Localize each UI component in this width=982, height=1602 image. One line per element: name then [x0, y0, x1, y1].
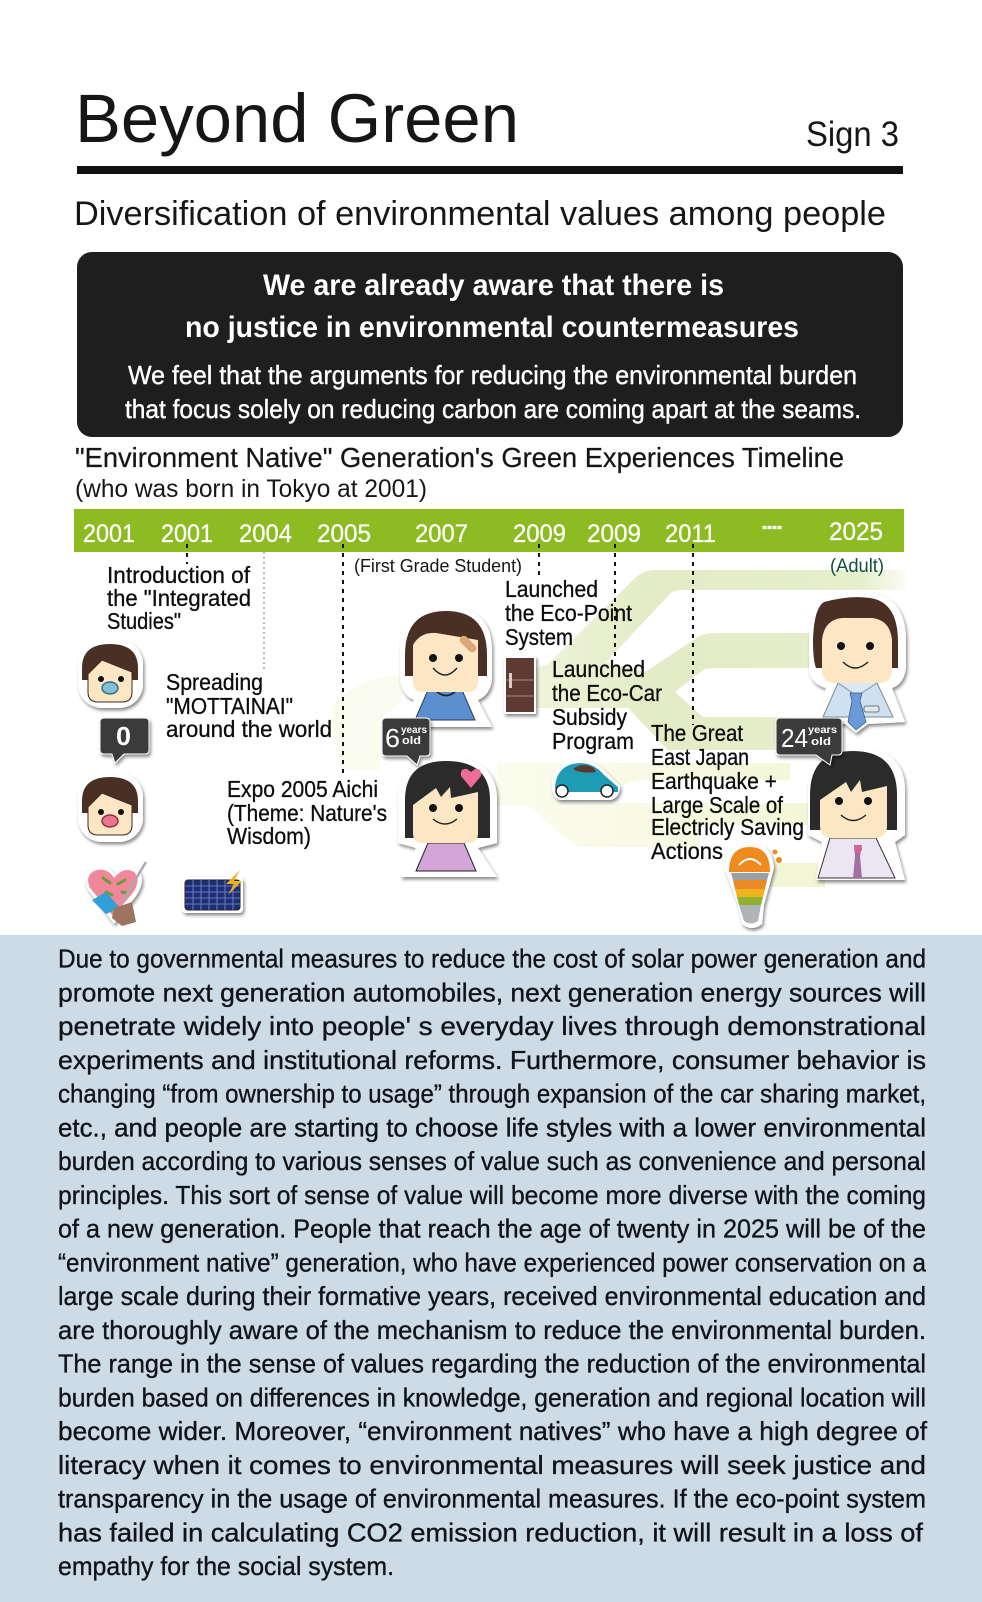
panel: explanatory text: empathy for the social system. — [58, 1551, 394, 1581]
event: mottainai — [166, 669, 332, 742]
event: expo 2005: Wisdom) — [227, 823, 311, 849]
event: integrated studies: the "Integrated — [107, 585, 251, 611]
bubble: age 24: old — [811, 736, 831, 748]
icon: sad light bulb — [725, 843, 782, 928]
event: earthquake: The Great — [651, 720, 743, 746]
subtitle: Diversification of environmental values among people — [74, 195, 886, 233]
year labels: 2011 — [665, 520, 716, 548]
icon: baby with blue pacifier — [78, 640, 143, 708]
event: eco-car: Launched — [552, 656, 645, 682]
panel: explanatory text: literacy when it comes to environmental measures will seek justice and — [58, 1450, 926, 1480]
stage label: adult: (Adult) — [830, 556, 884, 577]
panel: dark message box — [77, 252, 903, 437]
panel: dark message box: We feel that the arguments for reducing the environmental burden — [128, 360, 857, 390]
event: eco-point: Launched — [505, 576, 598, 602]
event: earthquake: Large Scale of — [651, 792, 783, 818]
event: eco-car: Program — [552, 728, 634, 754]
year labels: 2025 — [829, 518, 883, 546]
event: earthquake: Earthquake + — [651, 768, 777, 794]
event: expo 2005: (Theme: Nature's — [227, 800, 387, 826]
timeline bar — [74, 509, 904, 552]
panel: explanatory text: has failed in calculating CO2 emission reduction, it will result in a loss of — [58, 1517, 924, 1547]
event: expo 2005 — [227, 776, 387, 849]
panel: explanatory text: burden based on differences in knowledge, generation and regional location will — [58, 1382, 926, 1412]
sign number: Sign 3 — [806, 115, 899, 154]
year labels: 2001 — [161, 520, 213, 548]
panel: explanatory text: penetrate widely into people' s everyday lives through demonstrational — [58, 1011, 926, 1041]
event: integrated studies — [107, 562, 251, 634]
bubble: age 6: 6 — [385, 723, 400, 753]
event: eco-car — [552, 656, 662, 754]
icon: baby with pink pacifier — [78, 773, 143, 842]
event: integrated studies: Introduction of — [107, 562, 250, 588]
icon: adult man — [809, 592, 906, 733]
event: mottainai: around the world — [166, 716, 332, 742]
panel: explanatory text: promote next generation automobiles, next generation energy sources will — [58, 977, 926, 1007]
panel: explanatory text: The range in the sense of values regarding the reduction of the environmental — [58, 1349, 926, 1379]
icon: refrigerator — [504, 656, 536, 714]
bubble: age 6 — [382, 718, 430, 765]
event: eco-point — [505, 576, 632, 650]
timeline heading: (who was born in Tokyo at 2001) — [75, 475, 427, 503]
event: earthquake — [651, 720, 804, 864]
panel: explanatory text: changing “from ownership to usage” through expansion of the car sharing market, — [58, 1079, 926, 1109]
bubble: age 0: 0 — [116, 721, 131, 751]
icon: boy age 6 — [400, 607, 492, 727]
panel: dark message box: that focus solely on reducing carbon are coming apart at the seams. — [125, 394, 861, 424]
panel: explanatory text: “environment native” generation, who have experienced power conservation on a — [58, 1247, 926, 1277]
year labels: ---- — [762, 512, 782, 540]
bubble: age 6: old — [402, 735, 421, 747]
year labels — [83, 512, 883, 548]
panel: dark message box: We are already aware that there is — [263, 269, 724, 302]
panel: explanatory text: of a new generation. People that reach the age of twenty in 2025 will be of the — [58, 1214, 926, 1244]
timeline connector lines — [187, 544, 693, 776]
panel: explanatory text: principles. This sort of sense of value will become more diverse with the coming — [58, 1180, 926, 1210]
bubble: age 24 — [776, 718, 842, 765]
title rule — [77, 166, 903, 174]
panel: explanatory text: transparency in the usage of environmental measures. If the eco-point system — [58, 1484, 926, 1514]
event: eco-car: the Eco-Car — [552, 680, 662, 706]
bubble: age 0 — [100, 718, 149, 763]
event: earthquake: Electricly Saving — [651, 814, 804, 840]
panel: explanatory text: become wider. Moreover, “environment natives” who have a high degree of — [58, 1416, 928, 1446]
icon: adult woman — [808, 748, 905, 880]
bubble: age 24: years — [808, 725, 837, 736]
event: mottainai: "MOTTAINAI" — [166, 693, 293, 719]
event: earthquake: Actions — [651, 838, 723, 864]
year labels: 2009 — [587, 520, 641, 548]
year labels: 2007 — [415, 520, 468, 548]
event: earthquake: East Japan — [651, 744, 749, 770]
event: mottainai: Spreading — [166, 669, 263, 695]
stage label: first grade: (First Grade Student) — [354, 556, 522, 576]
panel: explanatory text: Due to governmental measures to reduce the cost of solar power generation and — [58, 944, 926, 974]
panel: explanatory text: experiments and institutional reforms. Furthermore, consumer behavior is — [58, 1045, 926, 1075]
bubble: age 24: 24 — [781, 723, 808, 753]
bubble: age 6: years — [401, 725, 427, 736]
background arrows: upper — [535, 570, 905, 750]
panel: explanatory text: burden according to various senses of value such as convenience and personal — [58, 1146, 926, 1176]
panel: dark message box: no justice in environmental countermeasures — [185, 311, 799, 344]
timeline heading: "Environment Native" Generation's Green Experiences Timeline — [75, 442, 844, 473]
title: Beyond Green — [75, 80, 519, 157]
icon: girl age 6 — [398, 757, 497, 877]
event: eco-car: Subsidy — [552, 704, 627, 730]
event: eco-point: System — [505, 624, 573, 650]
year labels: 2004 — [239, 520, 292, 548]
panel: explanatory text: etc., and people are starting to choose life styles with a lower environmental — [58, 1112, 926, 1142]
year labels: 2009 — [513, 520, 566, 548]
icon: heart with broom and dustpan — [85, 862, 146, 926]
event: eco-point: the Eco-Point — [505, 600, 632, 626]
event: integrated studies: Studies" — [107, 608, 181, 634]
panel: explanatory text: are thoroughly aware of the mechanism to reduce the environmental burden. — [58, 1315, 926, 1345]
icon: solar panel — [182, 870, 243, 913]
panel: explanatory text — [0, 935, 982, 1602]
year labels: 2005 — [317, 520, 371, 548]
event: expo 2005: Expo 2005 Aichi — [227, 776, 378, 802]
timeline heading — [75, 442, 844, 503]
background arrows: lower — [332, 675, 830, 887]
panel: explanatory text: large scale during their formative years, received environmental education and — [58, 1281, 926, 1311]
icon: eco car — [552, 760, 620, 800]
year labels: 2001 — [83, 520, 135, 548]
